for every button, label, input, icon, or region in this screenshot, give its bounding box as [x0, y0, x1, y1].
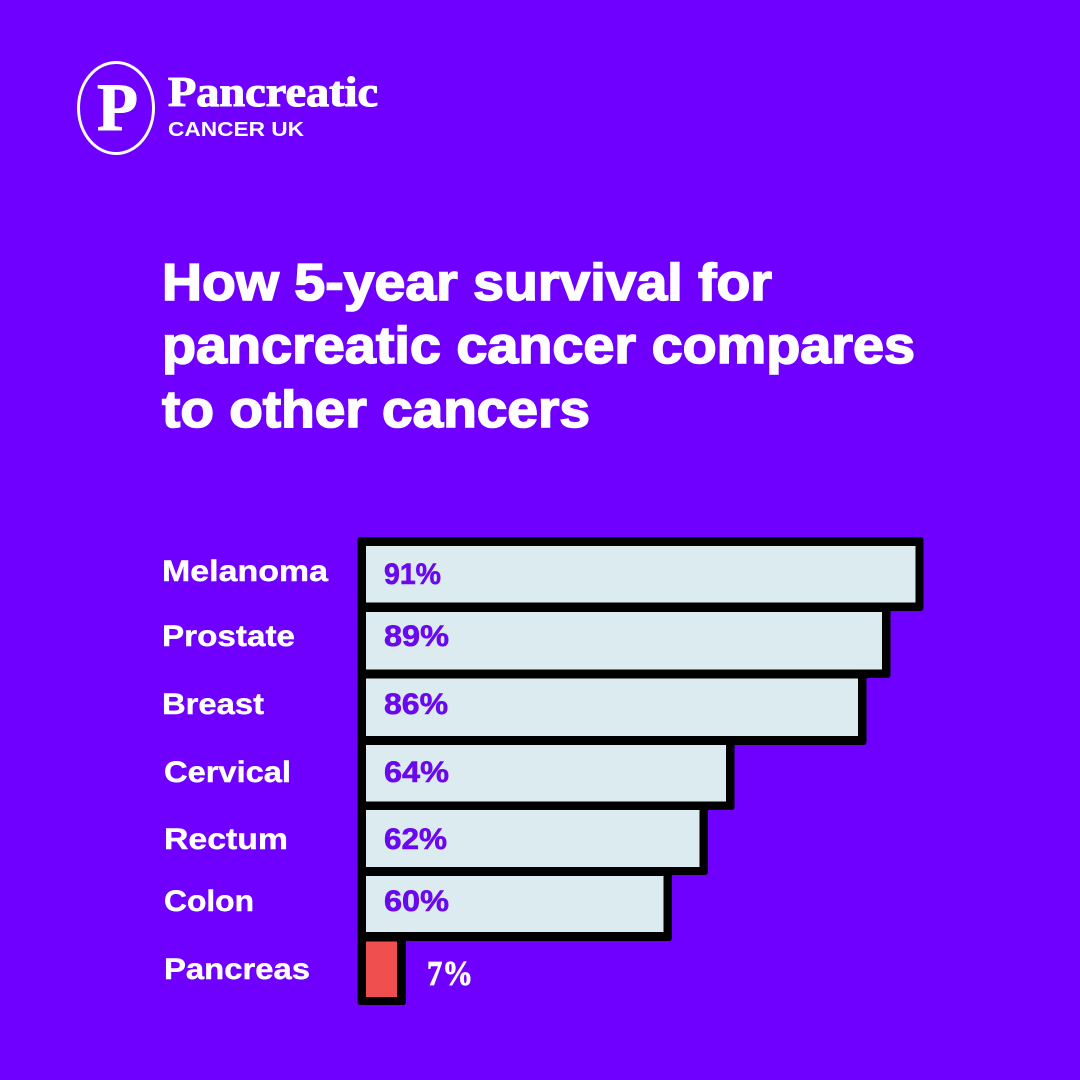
bar: Rectum 62%: 62%	[384, 823, 447, 856]
icon: oval P emblem: P	[97, 69, 138, 145]
bar: Colon 60%	[164, 876, 664, 932]
bar: Rectum 62%	[164, 810, 700, 867]
bar: Breast 86%: Breast	[162, 688, 264, 721]
chart outline	[358, 537, 924, 1005]
title: pancreatic cancer compares	[162, 317, 915, 375]
bar: Cervical 64%: Cervical	[164, 756, 291, 789]
icon: oval P emblem	[78, 62, 154, 154]
bar: Rectum 62%: Rectum	[164, 823, 288, 856]
bar: Breast 86%	[162, 678, 858, 736]
bar chart: 5-year survival by cancer type	[162, 537, 924, 1005]
bar: Colon 60%: Colon	[164, 885, 254, 918]
bar: Cervical 64%	[164, 745, 726, 802]
logo wordmark: Pancreatic	[168, 70, 378, 116]
title: to other cancers	[162, 381, 590, 439]
bar: Colon 60%: 60%	[384, 885, 449, 918]
title: How 5-year survival for	[162, 254, 772, 312]
bar: Prostate 89%	[162, 612, 882, 670]
bar: Cervical 64%: 64%	[384, 756, 449, 789]
bar: Melanoma 91%: 91%	[384, 558, 441, 591]
logo subtitle: CANCER UK	[168, 119, 305, 141]
title	[162, 254, 915, 439]
logo: Pancreatic Cancer UK	[78, 62, 378, 154]
bar: Prostate 89%: 89%	[384, 620, 449, 653]
bar: Breast 86%: 86%	[384, 688, 448, 721]
bar: Melanoma 91%	[162, 546, 916, 602]
bar: Melanoma 91%: Melanoma	[162, 555, 328, 588]
bar: Pancreas 7%: Pancreas	[164, 953, 310, 986]
bar: Prostate 89%: Prostate	[162, 620, 295, 653]
bar: Pancreas 7%: 7%	[427, 954, 473, 993]
bar: Pancreas 7%	[164, 942, 473, 997]
